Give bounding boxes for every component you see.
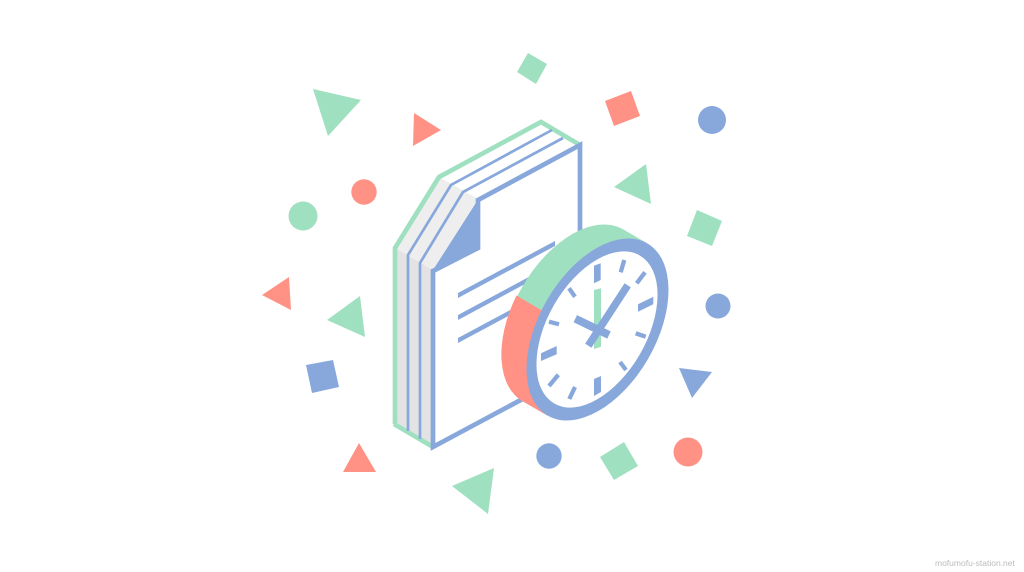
clock rim red: [501, 296, 548, 416]
second hand: [594, 288, 601, 349]
page slanted faces: [395, 177, 478, 270]
front page outline: [433, 145, 580, 447]
hour hand: [575, 319, 609, 335]
minor ticks: [549, 260, 646, 399]
clock face: [511, 231, 683, 428]
clock: [497, 214, 698, 445]
minute hand: [588, 285, 628, 346]
document stack: [394, 122, 580, 447]
page edge lines: [408, 130, 552, 431]
page side faces: [395, 248, 433, 447]
hour ticks: [541, 263, 653, 396]
watermark: mofumofu-station.net: [935, 558, 1015, 568]
text lines: [458, 241, 555, 343]
clock rim green: [502, 224, 647, 416]
folded corner: [433, 198, 479, 270]
confetti shapes: [262, 53, 730, 514]
clock bezel: [497, 214, 698, 445]
green outer outline: [395, 122, 580, 424]
